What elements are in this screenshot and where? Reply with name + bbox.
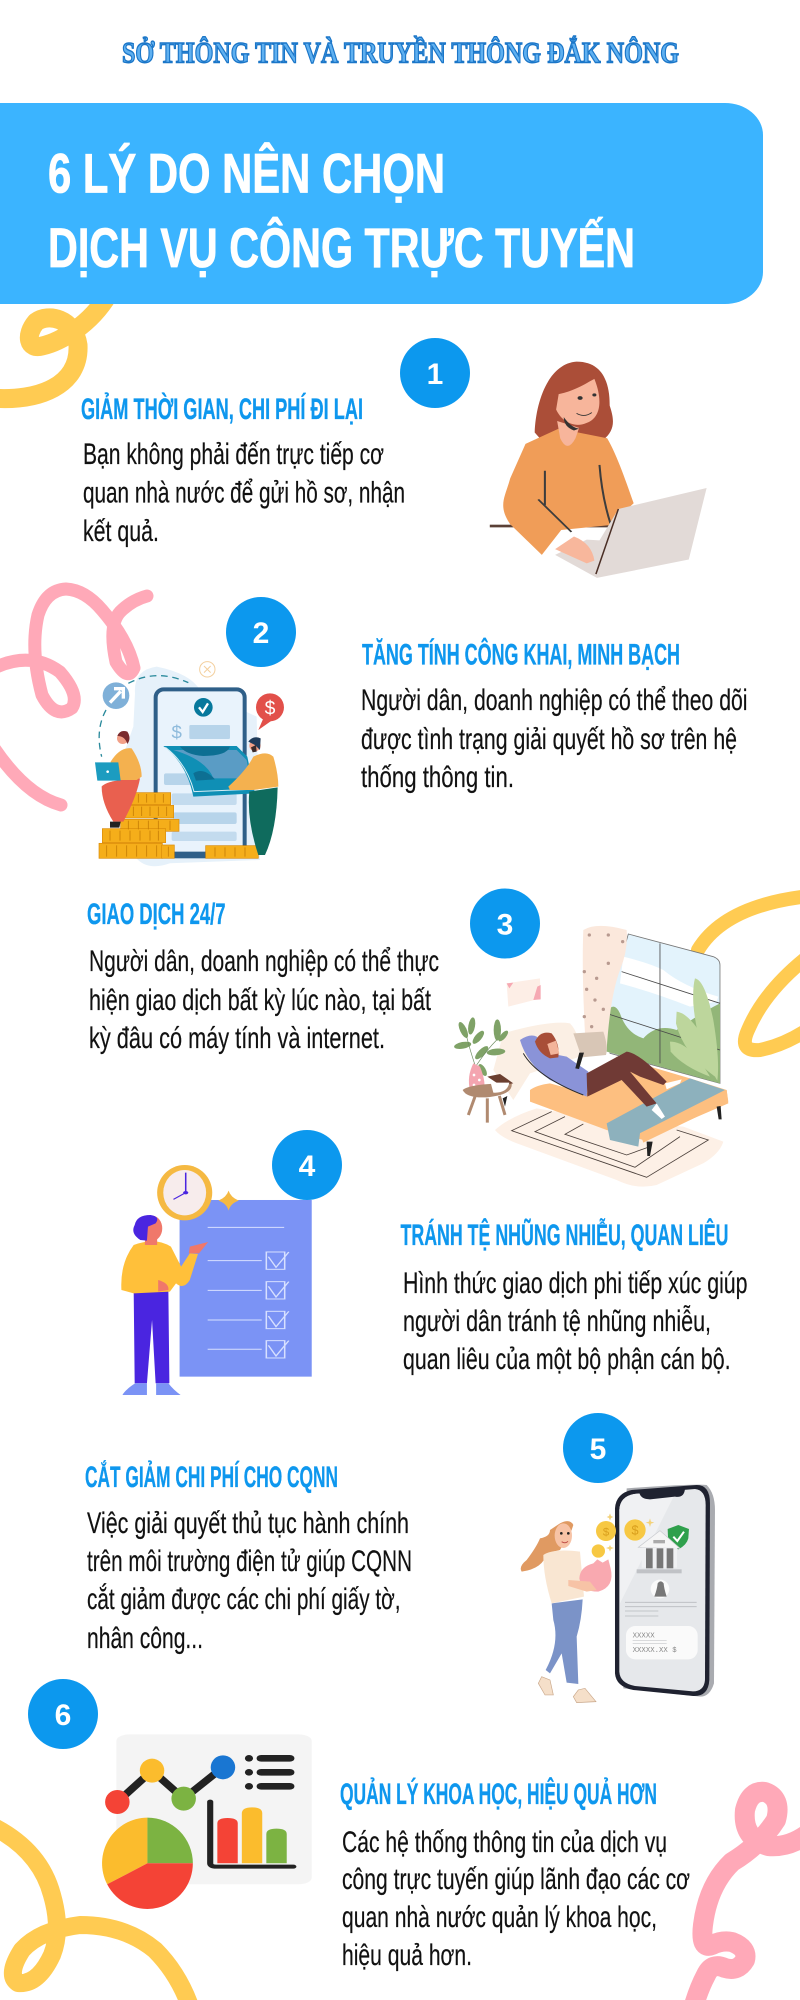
decoration: pink squiggle bottom right [692,1792,800,2000]
panel: reason 1 [81,338,707,578]
text block 1: Bạn không phải đến trực tiếp cơ [83,438,384,471]
text block 6: quan nhà nước quản lý khoa học, [342,1901,657,1934]
text block 3: Người dân, doanh nghiệp có thể thực [89,945,439,978]
decoration: yellow squiggle under banner [0,295,108,399]
illustration: finance app with people and coins: $ [171,721,182,742]
text block 5: trên môi trường điện tử giúp CQNN [87,1545,412,1578]
illustration: woman with laptop [490,362,707,578]
number badge 4: 4 [299,1150,316,1183]
panel: reason 6 [28,1679,690,1972]
decoration: pink squiggle left [0,589,147,805]
illustration: woman relaxing on bed by window [454,926,728,1187]
panel: reason 2 [95,597,747,866]
text block 5: cắt giảm được các chi phí giấy tờ, [87,1583,400,1616]
illustration: woman with piggy bank and banking phone: $ [631,1524,639,1538]
title line 1: 6 LÝ DO NÊN CHỌN [48,142,445,204]
number badge 4 [272,1130,342,1200]
number badge 6: 6 [55,1699,71,1732]
heading 5: CẮT GIẢM CHI PHÍ CHO CQNN [85,1460,338,1494]
number badge 1: 1 [427,358,443,391]
text block 2 [361,684,748,794]
organisation heading: SỞ THÔNG TIN VÀ TRUYỀN THÔNG ĐẮK NÔNG [122,36,679,70]
text block 5 [87,1507,412,1655]
text block 2: thống thông tin. [361,761,514,794]
number badge 2: 2 [253,617,269,650]
heading 1: GIẢM THỜI GIAN, CHI PHÍ ĐI LẠI [81,392,363,426]
number badge 5: 5 [590,1433,606,1466]
number badge 3 [470,888,540,958]
text block 4 [403,1267,748,1376]
decoration: yellow squiggle bottom left [0,1826,192,2000]
text block 6: hiệu quả hơn. [342,1939,472,1972]
illustration: woman with piggy bank and banking phone: $ [603,1526,610,1538]
text block 3: kỳ đâu có máy tính và internet. [89,1022,385,1055]
illustration: woman with piggy bank and banking phone [521,1485,715,1703]
heading 3: GIAO DỊCH 24/7 [87,898,226,931]
text block 1: quan nhà nước để gửi hồ sơ, nhận [83,476,405,510]
title banner [0,103,763,304]
panel: reason 5 [85,1413,715,1703]
number badge 6 [28,1679,98,1749]
decoration: yellow squiggle right [698,896,800,1050]
illustration: woman with piggy bank and banking phone: XXXXX [633,1632,655,1640]
illustration: woman with piggy bank and banking phone: XXXXX.XX $ [633,1647,677,1655]
text block 1 [83,438,405,548]
panel: reason 3 [87,888,728,1187]
panel: reason 4 [121,1130,747,1395]
chart illustration: line, pie and bar graphics [102,1734,312,1909]
illustration: woman with checklist and clock [121,1165,312,1395]
illustration: finance app with people and coins [95,662,284,866]
number badge 2 [226,597,296,667]
number badge 1 [400,338,470,408]
number badge 3: 3 [497,908,513,942]
text block 3: hiện giao dịch bất kỳ lúc nào, tại bất [89,984,431,1017]
text block 5: nhân công... [87,1622,203,1655]
text block 3 [89,945,439,1055]
text block 5: Việc giải quyết thủ tục hành chính [87,1507,409,1540]
text block 6 [342,1826,690,1972]
illustration: finance app with people and coins: $ [265,698,276,719]
text block 6: Các hệ thống thông tin của dịch vụ [342,1826,667,1859]
number badge 5 [563,1413,633,1483]
text block 1: kết quả. [83,515,159,548]
